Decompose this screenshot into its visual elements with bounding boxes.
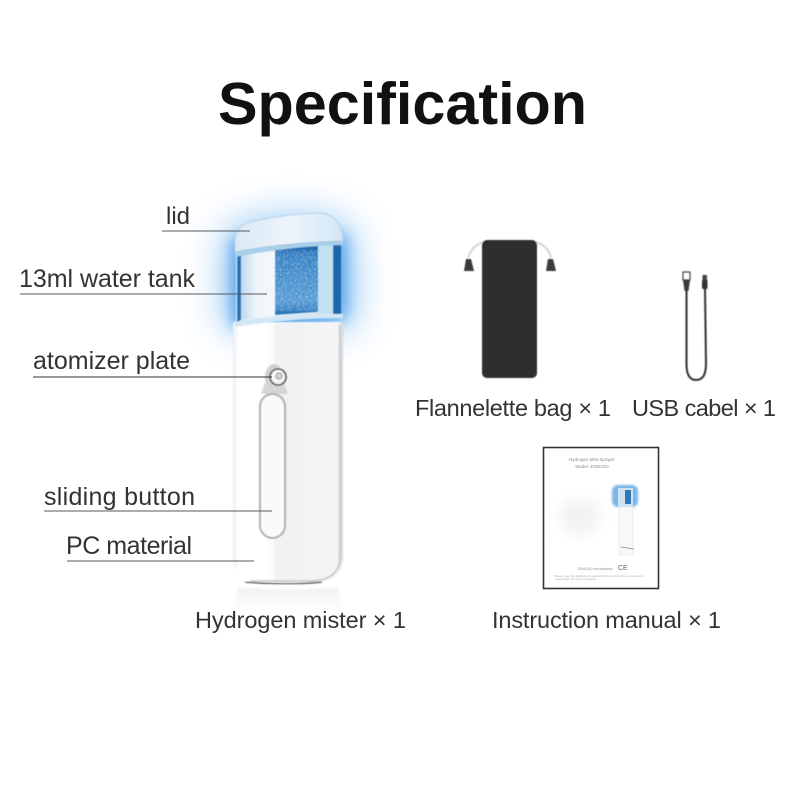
icon: instruction manual: keep them for future reference. xyxy=(556,577,597,581)
atomizer plate xyxy=(261,364,288,394)
tank edges xyxy=(237,255,241,322)
icon: instruction manual: CE xyxy=(618,565,628,572)
manual mist xyxy=(560,499,600,535)
title: Specification xyxy=(218,70,587,137)
icon: instruction manual: Model: ZXM-010 xyxy=(575,464,609,469)
manual product image xyxy=(612,485,638,555)
caption: flannelette bag: Flannelette bag × 1 xyxy=(415,395,611,421)
label: lid xyxy=(162,203,250,231)
caption: instruction manual: Instruction manual × 1 xyxy=(492,607,721,633)
tank left window xyxy=(241,248,275,320)
blue filter core xyxy=(275,243,318,315)
water tank xyxy=(235,241,343,327)
icon: flannelette bag xyxy=(464,240,556,378)
icon: USB cable xyxy=(683,272,708,380)
label: atomizer plate: atomizer plate xyxy=(33,347,190,375)
label: lid: lid xyxy=(166,203,190,230)
sliding button xyxy=(260,394,285,538)
label: sliding button: sliding button xyxy=(44,483,195,511)
lid xyxy=(235,213,343,252)
product: hydrogen mister xyxy=(226,213,354,612)
reflection xyxy=(233,587,343,612)
icon: instruction manual xyxy=(544,448,658,588)
manual footer: ZXM-010 Introductory xyxy=(578,567,613,571)
blue glow inner xyxy=(231,230,347,329)
device body xyxy=(233,322,343,583)
caption: hydrogen mister: Hydrogen mister × 1 xyxy=(195,607,406,633)
label: water tank: 13ml water tank xyxy=(19,265,196,293)
label: PC material: PC material xyxy=(66,532,192,560)
caption: USB cable: USB cabel × 1 xyxy=(632,395,776,421)
blue glow xyxy=(226,217,354,334)
icon: instruction manual: Please read the instructions carefully before using this product and xyxy=(554,574,643,578)
manual heading: Hydrogen Mist Sprayer xyxy=(569,457,616,462)
